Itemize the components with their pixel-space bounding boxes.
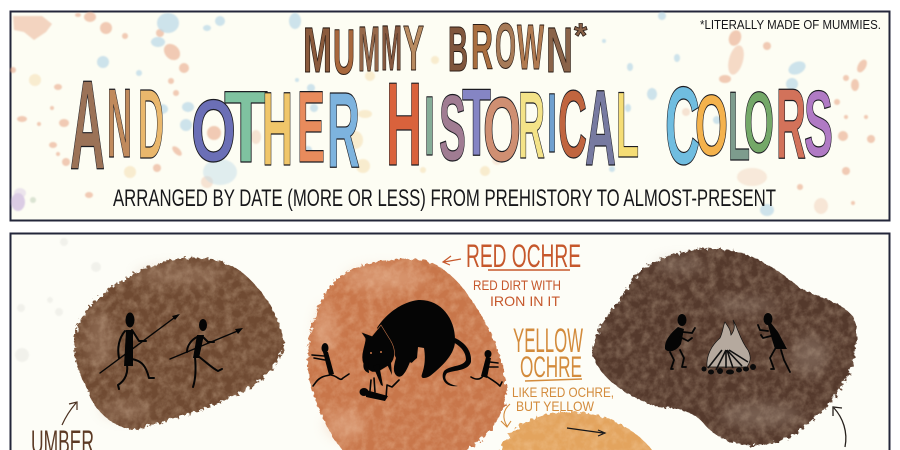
heading: Mummy Brown: M [381,12,402,84]
label: red ochre [442,244,580,306]
heading: And Other Historical Colors: N [107,68,132,178]
icon: person under cat [360,378,399,401]
blob: umber with hunters [74,258,284,430]
heading: And Other Historical Colors: O [191,81,236,180]
heading: Mummy Brown: R [471,11,493,83]
heading: Mummy Brown: O [495,10,516,82]
label: yellow ochre: OCHRE [520,351,582,384]
heading: Mummy Brown: B [448,13,468,85]
icon: fleeing person right [471,350,502,386]
heading: And Other Historical Colors: L [728,71,750,181]
label: red ochre: RED OCHRE [466,238,581,274]
heading: And Other Historical Colors: C [665,65,700,188]
heading: Mummy Brown: M [303,14,332,86]
light wash on red ochre [315,266,425,440]
heading: And Other Historical Colors: T [462,69,491,176]
heading: And Other Historical Colors: A [70,54,105,196]
heading: And Other Historical Colors: H [262,71,293,188]
panel: title banner: S [804,71,833,176]
heading: Mummy Brown: M [358,13,380,85]
label: yellow ochre: LIKE RED OCHRE, [512,384,614,400]
icon: figure left of fire [665,314,695,369]
faint wash marks [15,238,101,362]
heading: Mummy Brown: Y [403,12,424,84]
heading: Mummy Brown: U [333,16,355,88]
heading: And Other Historical Colors: D [138,69,164,179]
heading: And Other Historical Colors: H [386,58,422,191]
heading: And Other Historical Colors: C [558,71,587,178]
heading: And Other Historical Colors: S [439,75,466,180]
heading: And Other Historical Colors: R [327,69,360,190]
label: red ochre: RED DIRT WITH [473,277,561,293]
icon: fleeing person left [312,343,349,386]
heading: Mummy Brown: W [517,11,544,83]
blob: yellow ochre [497,412,660,450]
light wash on dark umber [655,258,828,427]
heading: And Other Historical Colors: T [224,70,268,184]
light wash on umber [86,265,225,419]
heading: Mummy Brown [303,10,588,88]
heading: And Other Historical Colors [70,54,833,196]
icon: figure right of fire [758,313,790,372]
icon: hunter with spear [100,312,180,389]
heading: And Other Historical Colors: O [695,78,728,174]
heading: And Other Historical Colors: R [518,72,545,179]
arrow: to dark umber [833,407,846,447]
watercolor splatter [10,12,875,216]
heading: And Other Historical Colors: L [616,72,639,177]
heading: And Other Historical Colors: I [547,76,557,170]
heading: And Other Historical Colors: O [744,75,774,171]
arrow on yellow blob [567,428,605,436]
icon: sabre-tooth cat [361,300,471,386]
label: yellow ochre: YELLOW [513,322,583,360]
heading: Mummy Brown: N [546,14,573,86]
panel: title banner [10,10,890,220]
icon: campfire [702,320,756,374]
heading: And Other Historical Colors: O [483,79,521,181]
heading: Mummy Brown: * [574,17,588,55]
blob: red ochre with cat [308,259,506,450]
footnote: *LITERALLY MADE OF MUMMIES. [700,17,881,32]
label: red ochre: IRON IN IT [490,293,560,309]
panel: prehistoric colors [10,234,890,450]
icon: second hunter with spear [170,319,243,387]
label: yellow ochre [501,322,614,427]
label: yellow ochre: BUT YELLOW [516,398,595,414]
heading: And Other Historical Colors: R [776,68,806,180]
heading: And Other Historical Colors: A [585,67,616,188]
heading: And Other Historical Colors: E [297,70,325,184]
blob: dark umber with campfire [593,249,856,445]
label: umber [31,402,94,450]
heading: And Other Historical Colors: I [424,79,435,173]
